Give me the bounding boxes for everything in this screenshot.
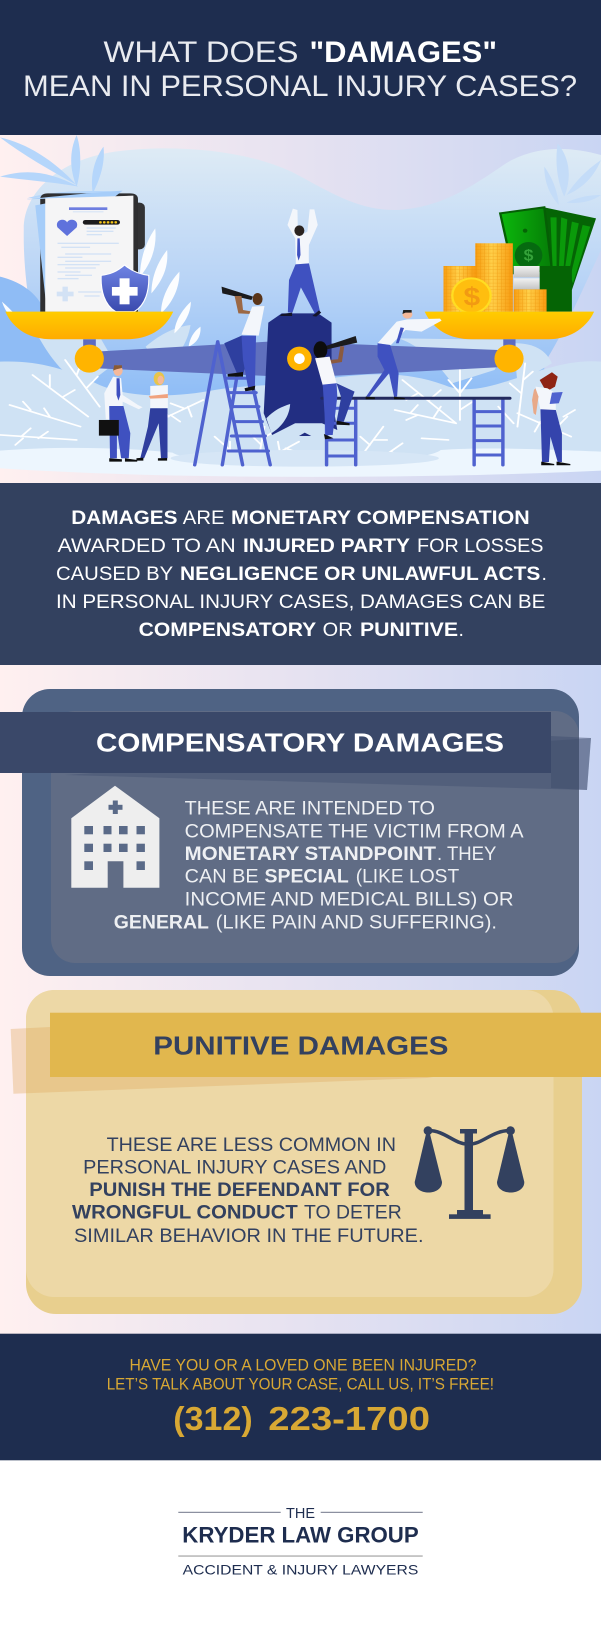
- title: [23, 36, 577, 103]
- intro text: OR: [323, 619, 353, 641]
- dollar sign on coin: $: [464, 282, 481, 311]
- heading band: [50, 1013, 601, 1077]
- gold coin stacks: [443, 243, 547, 313]
- white fronds near clipboard: [2, 228, 201, 347]
- intro text: CAUSED BY: [56, 563, 173, 585]
- phone number: [173, 1401, 430, 1438]
- top-left fronds: [0, 135, 123, 198]
- call to action text: LET’S TALK ABOUT YOUR CASE, CALL US, IT’S FREE!: [107, 1374, 494, 1393]
- punitive text: WRONGFUL CONDUCT: [72, 1202, 298, 1224]
- illustration: scale with people, medical records and money: [0, 135, 601, 477]
- compensatory text: . THEY: [437, 843, 496, 865]
- white branches: [0, 360, 575, 463]
- title: "DAMAGES": [310, 36, 497, 69]
- intro text: MONETARY COMPENSATION: [231, 507, 530, 529]
- compensatory text: SPECIAL: [264, 866, 349, 888]
- logo: The Kryder Law Group: ACCIDENT & INJURY LAWYERS: [183, 1561, 418, 1577]
- person: man pushing the beam: [366, 310, 442, 399]
- compensatory text: CAN BE: [185, 866, 259, 888]
- intro text: .: [458, 619, 464, 641]
- call to action panel: [0, 1334, 601, 1460]
- logo: The Kryder Law Group: THE: [286, 1506, 315, 1522]
- page background: [0, 135, 601, 1334]
- panel: punitive damages: [11, 990, 601, 1314]
- ground hills: [0, 361, 601, 463]
- person: woman with telescope: [314, 336, 357, 439]
- platform with ladders: [322, 398, 510, 465]
- heading band: PUNITIVE DAMAGES: [153, 1031, 449, 1061]
- compensatory text: (LIKE PAIN AND SUFFERING).: [216, 912, 497, 934]
- title: MEAN IN PERSONAL INJURY CASES?: [23, 70, 577, 103]
- phone number: (312): [173, 1401, 253, 1438]
- scale beam: [75, 342, 524, 376]
- compensatory text: COMPENSATE THE VICTIM FROM A: [185, 821, 524, 843]
- person: man with briefcase: [99, 365, 143, 462]
- icon: heart: [57, 220, 77, 236]
- logo: The Kryder Law Group: KRYDER LAW GROUP: [182, 1522, 419, 1547]
- intro text: FOR LOSSES: [417, 535, 544, 557]
- intro text: .: [542, 563, 547, 585]
- person: man with telescope on ladder: [222, 287, 264, 391]
- intro text: AWARDED TO AN: [58, 535, 236, 557]
- header panel: [0, 0, 601, 135]
- person: man on top with raised arms: [280, 209, 321, 317]
- title: WHAT DOES: [104, 36, 298, 69]
- compensatory text: [114, 798, 524, 934]
- snowy ground: [0, 448, 601, 477]
- punitive text: PUNISH THE DEFENDANT FOR: [89, 1179, 390, 1201]
- compensatory text: MONETARY STANDPOINT: [185, 843, 436, 865]
- heading band: COMPENSATORY DAMAGES: [96, 728, 504, 758]
- intro panel: [0, 483, 601, 665]
- icon: scales of justice: [415, 1126, 524, 1219]
- compensatory text: INCOME AND MEDICAL BILLS) OR: [185, 889, 514, 911]
- scale pans: [5, 312, 594, 347]
- green bills: [500, 207, 596, 312]
- intro text: INJURED PARTY: [243, 535, 410, 557]
- panel: compensatory damages: [0, 689, 591, 976]
- top-right fronds: [544, 143, 601, 205]
- punitive text: TO DETER: [304, 1202, 402, 1224]
- compensatory text: (LIKE LOST: [356, 866, 459, 888]
- phone number: 223-1700: [268, 1401, 430, 1438]
- clipboard with medical record: [26, 191, 145, 312]
- dollar sign on bill: $: [524, 247, 533, 264]
- heading band: [0, 712, 551, 773]
- intro text: COMPENSATORY: [139, 619, 316, 641]
- logo: The Kryder Law Group: [178, 1506, 423, 1577]
- call to action text: [107, 1356, 494, 1393]
- pale foliage behind the pans: [38, 325, 552, 387]
- scale centre post: [264, 313, 337, 436]
- compensatory text: GENERAL: [114, 912, 209, 934]
- background blob: [24, 148, 601, 397]
- intro text: IN PERSONAL INJURY CASES, DAMAGES CAN BE: [56, 591, 545, 613]
- punitive text: PERSONAL INJURY CASES AND: [83, 1157, 386, 1179]
- compensatory text: THESE ARE INTENDED TO: [185, 798, 435, 820]
- intro text: ARE: [183, 507, 225, 529]
- call to action text: HAVE YOU OR A LOVED ONE BEEN INJURED?: [130, 1356, 476, 1375]
- left blue leaf: [0, 277, 73, 388]
- person: woman with clipboard: [532, 372, 570, 465]
- intro text: PUNITIVE: [360, 619, 458, 641]
- punitive text: [72, 1134, 423, 1247]
- intro text: NEGLIGENCE OR UNLAWFUL ACTS: [180, 563, 540, 585]
- punitive text: THESE ARE LESS COMMON IN: [107, 1134, 396, 1156]
- intro text: DAMAGES: [71, 507, 178, 529]
- left ladder: [195, 342, 270, 465]
- punitive text: SIMILAR BEHAVIOR IN THE FUTURE.: [74, 1225, 423, 1247]
- icon: medical shield: [101, 265, 149, 312]
- intro text: [56, 507, 547, 641]
- person: blonde woman: [136, 372, 168, 461]
- icon: hospital: [71, 786, 159, 888]
